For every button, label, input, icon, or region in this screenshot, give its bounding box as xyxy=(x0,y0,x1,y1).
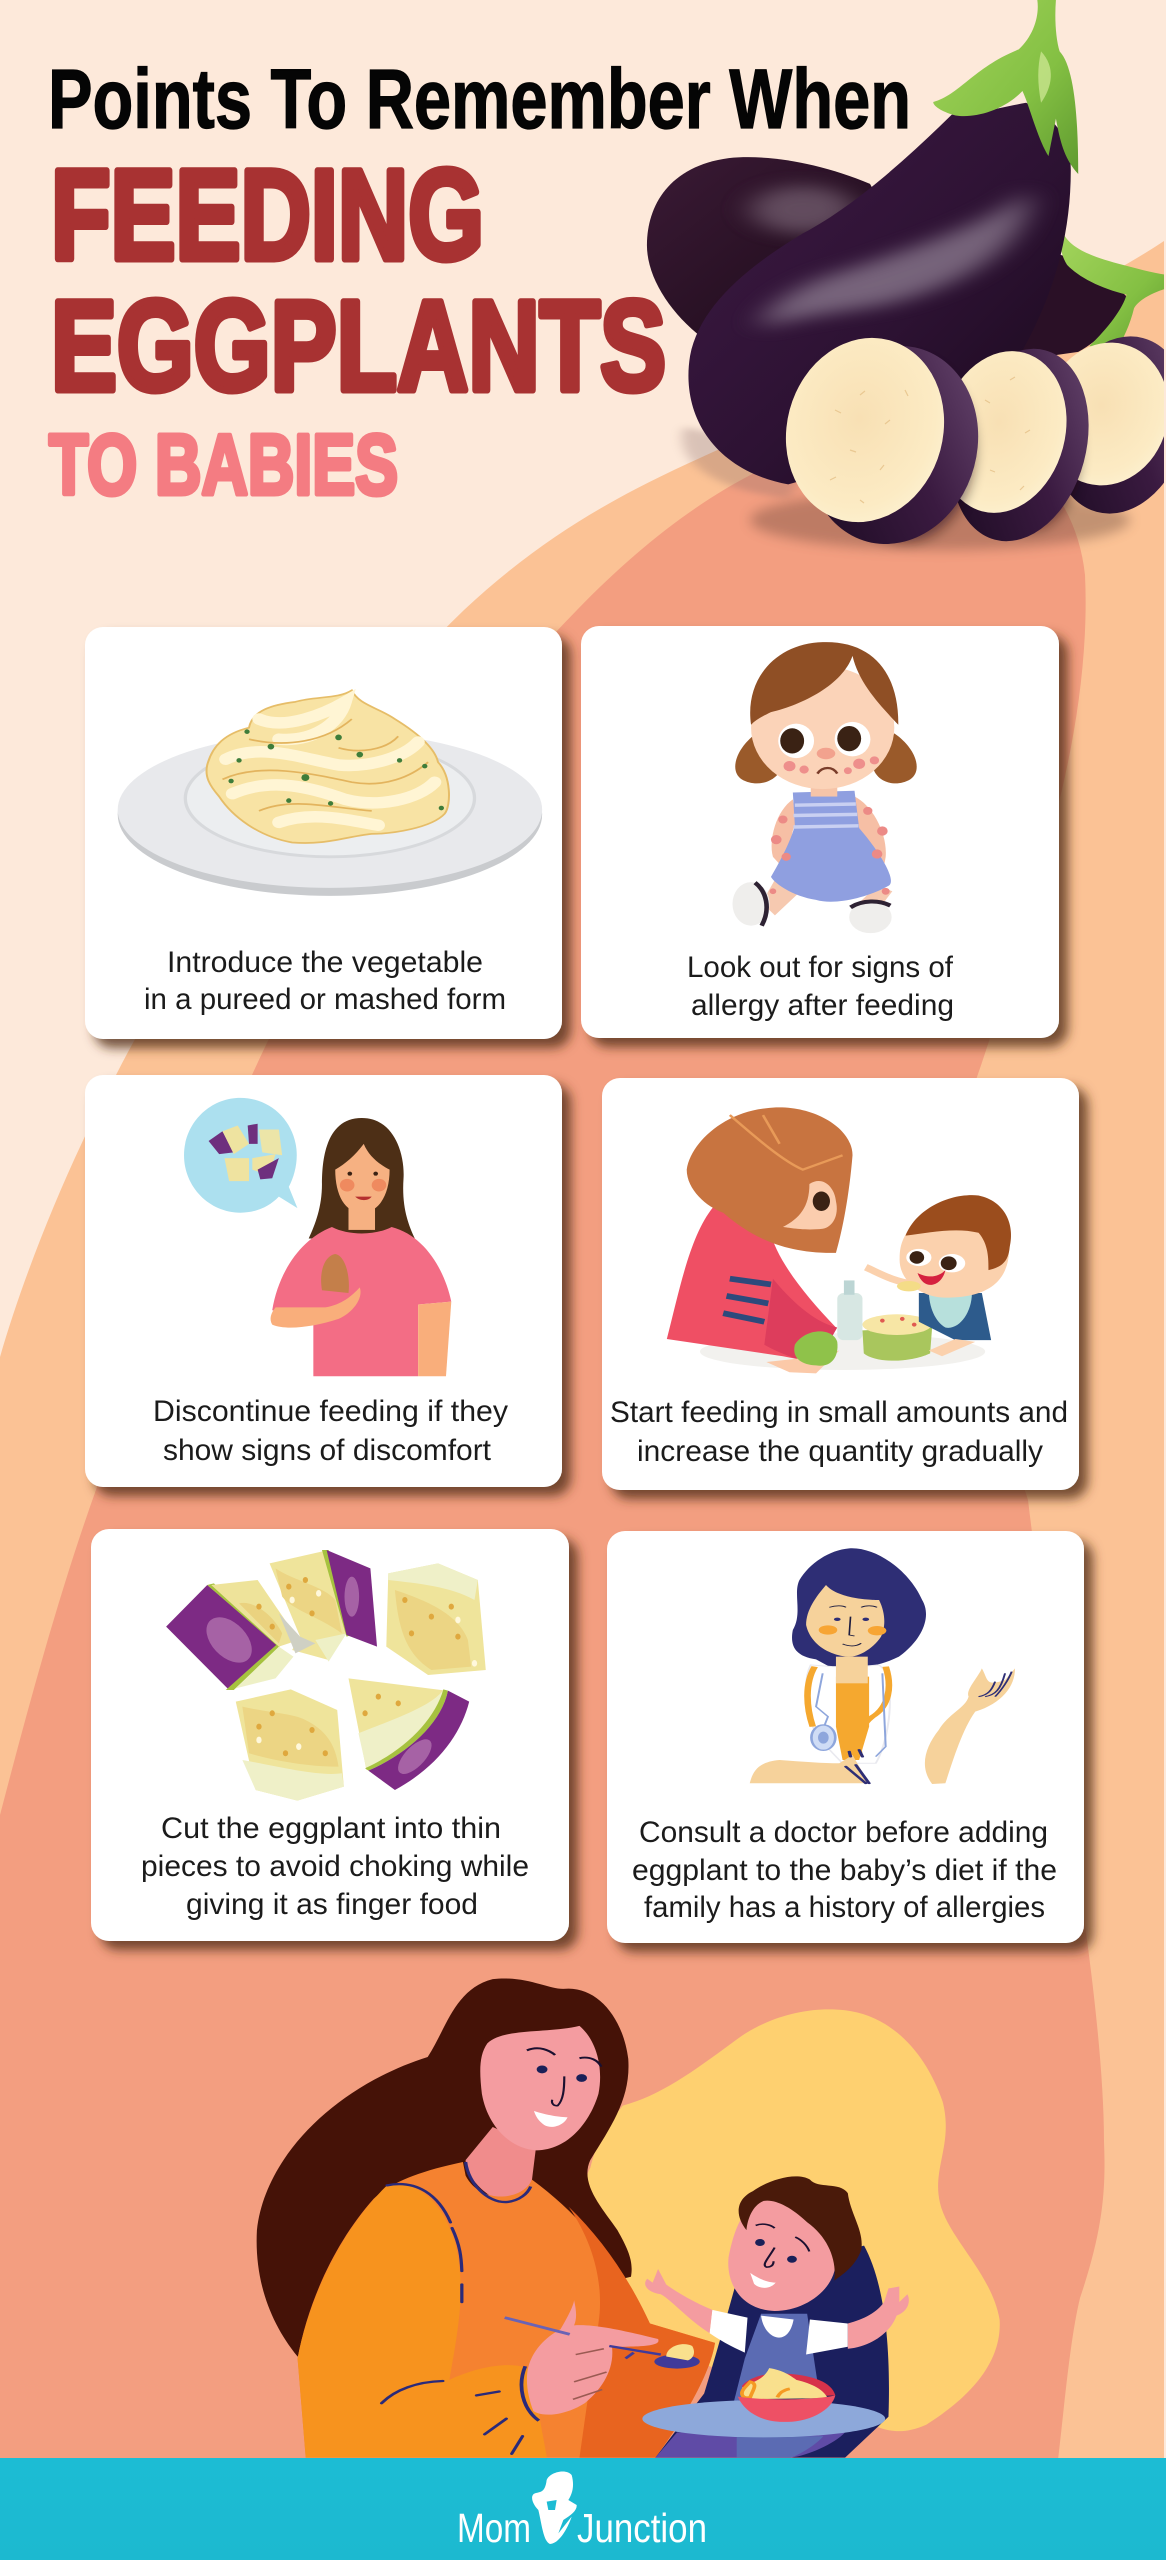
background: salmon wave xyxy=(0,420,1105,2460)
caption xyxy=(687,951,954,1022)
icon: plate of mash xyxy=(118,690,542,896)
caption xyxy=(141,1812,529,1921)
card background xyxy=(607,1531,1084,1943)
illustration: mother feeding child xyxy=(257,1978,1000,2458)
caption: Discontinue feeding if they xyxy=(153,1395,508,1428)
slice 1 xyxy=(766,320,1000,563)
heading: to babies: TO BABIES xyxy=(49,418,398,513)
bowl of food xyxy=(738,2368,835,2422)
caption: Cut the eggplant into thin xyxy=(161,1812,501,1845)
icon: eggplant pieces xyxy=(166,1550,486,1801)
caption: Consult a doctor before adding xyxy=(639,1816,1048,1849)
card: signs of allergy xyxy=(581,626,1059,1038)
mother xyxy=(257,1978,715,2458)
tray xyxy=(642,2400,885,2437)
background: right edge sliver xyxy=(1164,241,1166,2460)
caption: show signs of discomfort xyxy=(163,1434,492,1467)
yellow blob xyxy=(587,2009,1000,2431)
card background xyxy=(91,1529,569,1941)
caption: Start feeding in small amounts and xyxy=(610,1396,1068,1429)
card: cut eggplant xyxy=(91,1529,569,1941)
footer band xyxy=(0,2458,1166,2560)
caption xyxy=(153,1395,508,1467)
child in high chair xyxy=(642,2176,909,2458)
caption xyxy=(632,1816,1057,1924)
caption: family has a history of allergies xyxy=(644,1891,1045,1924)
caption: Look out for signs of xyxy=(687,951,954,984)
logo: momjunction xyxy=(457,2471,707,2551)
icon: girl with rash xyxy=(732,642,917,933)
logo text: Junction xyxy=(577,2505,707,2551)
caption: giving it as finger food xyxy=(186,1888,478,1921)
card background xyxy=(581,626,1059,1038)
title: points to remember when: Points To Remember When xyxy=(48,52,911,146)
caption: eggplant to the baby’s diet if the xyxy=(632,1854,1057,1887)
caption xyxy=(610,1396,1068,1468)
logo silhouette xyxy=(532,2471,577,2544)
icon: mother feeding toddler xyxy=(667,1107,1011,1373)
card background xyxy=(85,1075,562,1487)
card background xyxy=(85,627,562,1039)
card background xyxy=(602,1078,1079,1490)
logo text xyxy=(457,2505,707,2551)
caption: pieces to avoid choking while xyxy=(141,1850,529,1883)
heading: eggplants: EGGPLANTS xyxy=(51,275,666,418)
caption: allergy after feeding xyxy=(691,989,954,1022)
card: pureed or mashed xyxy=(85,627,562,1039)
illustration: eggplants xyxy=(647,0,1166,563)
icon: doctor xyxy=(750,1548,1015,1784)
card: start small amounts xyxy=(602,1078,1079,1490)
caption: Introduce the vegetable xyxy=(167,946,483,979)
icon: woman refusing food xyxy=(184,1098,451,1376)
card: consult a doctor xyxy=(607,1531,1084,1943)
slice 3 xyxy=(1027,321,1166,529)
heading: feeding: FEEDING xyxy=(51,144,484,287)
slice 2 xyxy=(922,333,1109,557)
caption: increase the quantity gradually xyxy=(637,1435,1043,1468)
caption xyxy=(144,946,506,1016)
card: discontinue feeding xyxy=(85,1075,562,1487)
logo text: Mom xyxy=(457,2505,531,2551)
caption: in a pureed or mashed form xyxy=(144,983,506,1016)
